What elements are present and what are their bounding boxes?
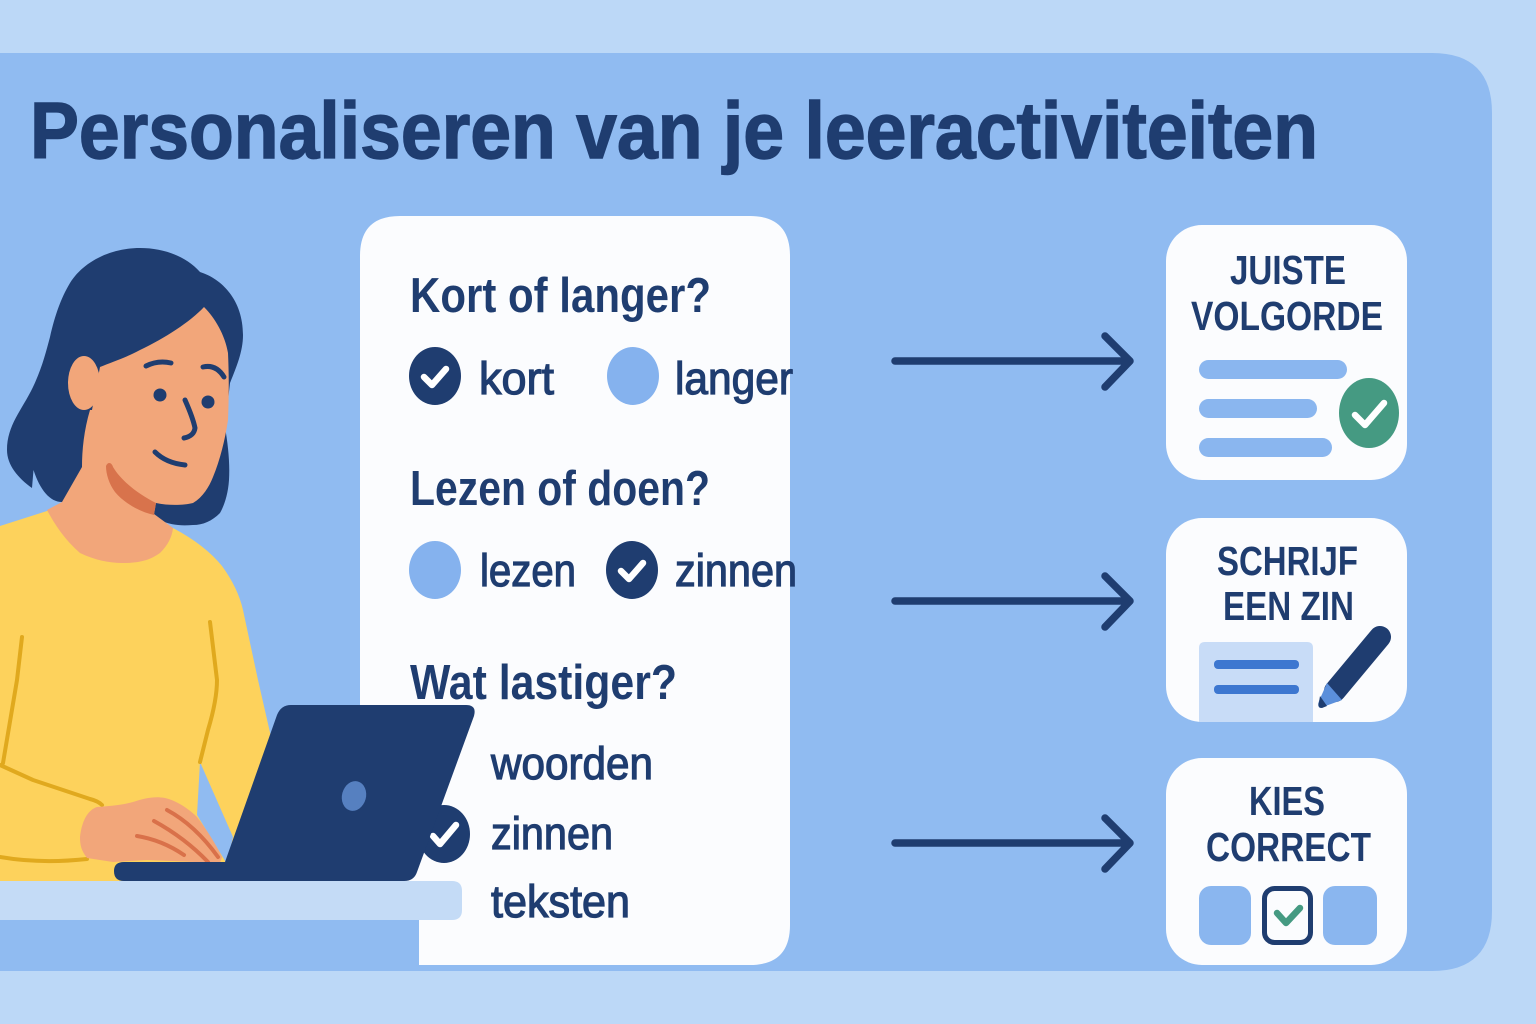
choice box right bbox=[1323, 886, 1377, 945]
arrow 2 bbox=[895, 576, 1130, 627]
option: kort selected: kort bbox=[479, 353, 554, 404]
option: woorden: woorden bbox=[490, 738, 653, 789]
card title bbox=[1191, 247, 1383, 339]
card title: VOLGORDE bbox=[1191, 293, 1383, 339]
laptop logo bbox=[339, 778, 369, 814]
icon: pencil bbox=[1318, 637, 1380, 708]
card title: JUISTE bbox=[1230, 247, 1346, 293]
choice box selected bbox=[1264, 888, 1310, 942]
card title: SCHRIJF bbox=[1217, 538, 1358, 584]
heading: wat lastiger: Wat lastiger? bbox=[410, 656, 677, 710]
list bars bbox=[1199, 360, 1347, 457]
option: lezen: lezen bbox=[480, 545, 576, 596]
ear bbox=[68, 356, 100, 410]
gap between arm and body bbox=[197, 762, 233, 864]
chin shadow bbox=[106, 463, 156, 515]
desk bbox=[0, 881, 462, 920]
eyes bbox=[154, 388, 214, 408]
icon: green check bbox=[1339, 378, 1399, 448]
neck and face bbox=[47, 307, 229, 563]
hair bbox=[7, 248, 243, 525]
option: langer: langer bbox=[675, 353, 793, 404]
hand bbox=[80, 797, 222, 863]
card title bbox=[1217, 538, 1358, 629]
arrow 3 bbox=[895, 818, 1130, 869]
card: schrijf een zin bbox=[1166, 518, 1407, 722]
panel: questions card bbox=[360, 216, 797, 965]
option: zinnen selected check: zinnen bbox=[491, 808, 613, 859]
card title bbox=[1206, 778, 1371, 870]
sweater bbox=[0, 511, 290, 881]
heading: lezen of doen: Lezen of doen? bbox=[410, 462, 710, 516]
choice box left bbox=[1199, 886, 1251, 945]
face features bbox=[146, 362, 224, 465]
laptop bbox=[114, 705, 475, 881]
card: kies correct bbox=[1166, 758, 1407, 965]
arrow 1 bbox=[895, 336, 1130, 387]
option: kort selected bbox=[409, 347, 554, 405]
card title: CORRECT bbox=[1206, 824, 1371, 870]
icon: document bbox=[1199, 642, 1313, 722]
card title: KIES bbox=[1249, 778, 1325, 824]
option: zinnen selected check bbox=[418, 805, 613, 863]
option: langer bbox=[607, 347, 793, 405]
card title: EEN ZIN bbox=[1223, 583, 1354, 629]
illustration: woman at laptop bbox=[0, 248, 475, 920]
option: zinnen selected bbox=[606, 541, 797, 599]
option: zinnen selected: zinnen bbox=[675, 545, 797, 596]
sweater fold lines bbox=[0, 622, 217, 861]
title: Personaliseren van je leeractiviteiten bbox=[30, 86, 1318, 175]
card: juiste volgorde bbox=[1166, 225, 1407, 480]
fingers bbox=[137, 810, 218, 862]
option: teksten: teksten bbox=[491, 876, 630, 927]
heading: kort of langer: Kort of langer? bbox=[410, 269, 711, 323]
option: lezen bbox=[409, 541, 576, 599]
